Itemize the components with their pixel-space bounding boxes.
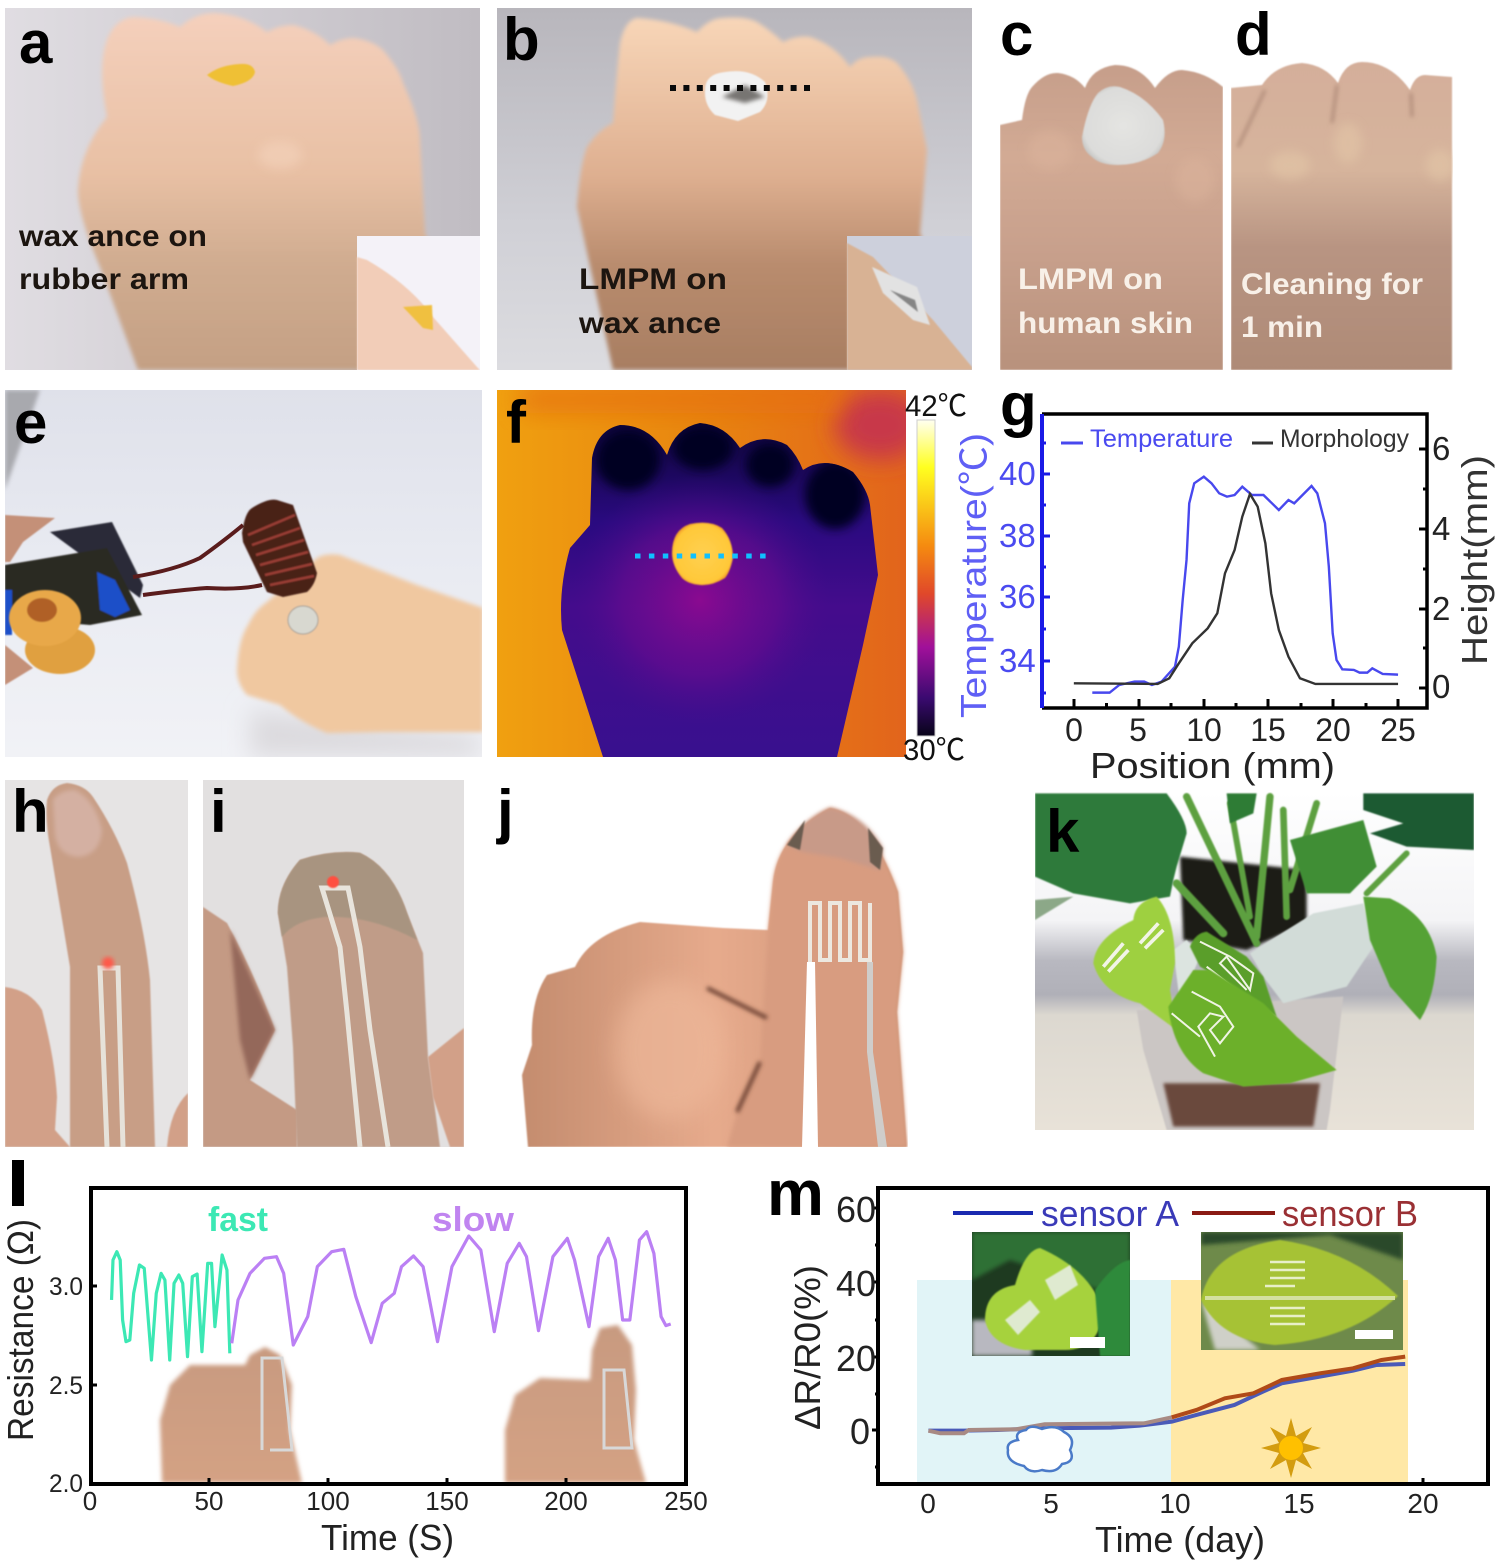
human hand d [1231, 62, 1452, 370]
x axis numbers: 10 [1186, 712, 1222, 748]
warm background tint [835, 390, 925, 460]
plot frame g [1042, 414, 1427, 708]
fast label: fast [208, 1201, 268, 1239]
right axis numbers [1432, 430, 1450, 705]
y axis title m: ΔR/R0(%) [787, 1265, 828, 1430]
chart l: resistance vs time [0, 1188, 708, 1558]
printed circuit h [100, 968, 123, 1147]
rubber hand b [577, 18, 972, 370]
temperature colour bar: 30℃ [903, 734, 965, 767]
right axis numbers: 2 [1432, 590, 1450, 627]
left axis title g: Temperature(℃) [953, 433, 994, 718]
printed leads j [802, 962, 818, 1147]
caption a: wax ance on [18, 220, 207, 253]
left axis numbers: 38 [999, 517, 1036, 554]
y axis numbers l: 2.5 [49, 1372, 83, 1400]
x axis title l: Time (S) [321, 1517, 454, 1558]
x axis numbers m: 15 [1283, 1488, 1315, 1519]
wax drop [207, 64, 255, 86]
panel e: induction heater photo [5, 390, 483, 757]
legend g: Morphology [1280, 425, 1409, 453]
hand e [237, 554, 483, 733]
thumb i [278, 852, 440, 1147]
toroid coil [9, 590, 95, 674]
finger creases d [1238, 85, 1412, 147]
left axis numbers: 40 [999, 455, 1036, 492]
nail edge shadows [787, 820, 883, 870]
cloudy background [917, 1280, 1171, 1483]
fingernail h [53, 790, 102, 857]
y axis numbers l [49, 1273, 83, 1498]
copper wires [133, 525, 262, 595]
x axis numbers m: 0 [920, 1488, 936, 1519]
plot frame l [91, 1188, 686, 1484]
x axis numbers m: 20 [1407, 1488, 1439, 1519]
label c: c [1000, 1, 1033, 68]
rubber hand a [76, 12, 428, 370]
LED i [327, 876, 339, 888]
caption c: LMPM on [1018, 263, 1163, 296]
top right leaf [1363, 793, 1474, 850]
leaf right [1363, 897, 1437, 1020]
panel h: finger with LED [5, 780, 188, 1147]
label m: m [767, 1157, 824, 1229]
knuckle shadows [596, 426, 865, 529]
morphology curve [1074, 494, 1398, 684]
dotted scan line [670, 85, 812, 91]
cyan scan line [635, 554, 767, 558]
right axis numbers: 4 [1432, 510, 1450, 547]
leaf centre [1190, 932, 1277, 1017]
y axis numbers m: 20 [836, 1338, 876, 1379]
palm crease [707, 988, 767, 1112]
clear pot [1137, 997, 1343, 1130]
panel c: LMPM on human skin [1000, 65, 1223, 370]
inset b [847, 236, 972, 370]
silver patch on skin [1082, 86, 1165, 165]
x axis title g: Position (mm) [1090, 745, 1335, 786]
x axis numbers l: 200 [544, 1486, 588, 1516]
x axis numbers l [83, 1486, 708, 1516]
leaf photo right [1201, 1232, 1403, 1350]
thumbnail [787, 808, 883, 870]
x axis numbers l: 250 [664, 1486, 708, 1516]
leaf photo left [972, 1232, 1130, 1356]
serpentine sensor j [810, 903, 870, 962]
sensor B curve [928, 1357, 1405, 1433]
fast curve [112, 1252, 230, 1360]
grey corner [5, 390, 40, 490]
panel k: plant with leaf sensors [1034, 792, 1474, 1130]
x axis numbers m [920, 1488, 1439, 1519]
x axis numbers l: 150 [425, 1486, 469, 1516]
stems [1177, 797, 1407, 943]
leaf large with serpentine [1168, 970, 1337, 1087]
panel j: thumb with serpentine sensor [522, 808, 907, 1147]
chart g: temperature and morphology [953, 414, 1495, 786]
x axis title m: Time (day) [1095, 1519, 1265, 1560]
y axis numbers l: 2.0 [49, 1470, 83, 1498]
hot spot [672, 523, 733, 585]
temperature curve [1092, 477, 1398, 693]
lower left foliage [1035, 897, 1073, 920]
thumb photo right [505, 1325, 646, 1483]
thumb tone [727, 808, 907, 1147]
caption b: wax ance [578, 307, 721, 340]
label g: g [1000, 371, 1037, 438]
silver LMPM blob [705, 71, 768, 121]
x axis numbers: 5 [1129, 712, 1147, 748]
panel a: wax ance on rubber arm [5, 8, 480, 370]
caption c: human skin [1018, 307, 1193, 340]
palm highlight [615, 980, 725, 1120]
y axis numbers m: 60 [836, 1189, 876, 1230]
caption b [578, 268, 725, 334]
holding hand left [5, 515, 55, 685]
right axis numbers: 0 [1432, 668, 1450, 705]
soil in pot [1163, 1083, 1320, 1127]
panel b: LMPM on wax ance [497, 8, 972, 370]
x axis numbers: 0 [1065, 712, 1083, 748]
leaf left [1093, 897, 1177, 1030]
label d: d [1235, 1, 1272, 68]
label f: f [506, 389, 527, 456]
knuckle highlights d [1275, 127, 1453, 178]
warm halo [596, 488, 804, 702]
x axis numbers: 15 [1250, 712, 1286, 748]
label k: k [1046, 798, 1080, 865]
caption b: LMPM on [579, 263, 727, 296]
hand j [522, 808, 907, 1147]
index finger h [46, 783, 155, 1147]
panel f: thermal image [497, 385, 925, 760]
x axis numbers m: 10 [1159, 1488, 1191, 1519]
icon: sun [1261, 1418, 1321, 1478]
label l [12, 1160, 24, 1206]
central leaves [1290, 820, 1377, 893]
top orange band [520, 385, 840, 413]
temperature colour bar: 42℃ [905, 390, 967, 423]
neighbour fingers h [5, 987, 188, 1147]
caption d [1242, 272, 1423, 337]
label a: a [19, 9, 53, 76]
plot frame m [872, 1188, 1488, 1484]
slow curve [232, 1232, 671, 1345]
silver dot [288, 606, 318, 634]
temperature colour bar [903, 390, 967, 767]
slow label: slow [432, 1201, 515, 1239]
knuckle highlights c [1028, 130, 1215, 202]
thumb photo left [160, 1347, 302, 1483]
y axis title l: Resistance (Ω) [0, 1219, 41, 1441]
copper coil [242, 500, 317, 597]
x axis numbers l: 100 [306, 1486, 350, 1516]
finger shadow i [230, 930, 275, 1080]
sunny background [1171, 1280, 1408, 1483]
caption a [18, 230, 205, 290]
y axis numbers m [836, 1189, 876, 1452]
LED h [102, 957, 114, 969]
legend g [1061, 425, 1409, 453]
caption d: 1 min [1241, 311, 1323, 344]
caption d: Cleaning for [1241, 268, 1423, 301]
legend m: sensor A [1041, 1193, 1179, 1234]
right axis numbers: 6 [1432, 430, 1450, 467]
x axis numbers m: 5 [1043, 1488, 1059, 1519]
paper wrap [1250, 903, 1373, 1003]
legend m [953, 1193, 1418, 1234]
thermal hand [555, 420, 885, 760]
legend g: Temperature [1090, 425, 1233, 453]
x axis numbers: 25 [1380, 712, 1416, 748]
neighbour finger left i [203, 907, 297, 1147]
printed circuit i [322, 888, 388, 1147]
inset a [357, 236, 480, 370]
caption c [1020, 268, 1192, 334]
label j: j [496, 778, 514, 845]
skin highlight a [262, 144, 298, 167]
icon: cloud [1008, 1427, 1072, 1471]
left axis numbers: 34 [999, 642, 1036, 679]
label b: b [503, 6, 540, 73]
legend m: sensor B [1282, 1193, 1418, 1234]
label e: e [14, 389, 47, 456]
x axis numbers l: 50 [195, 1486, 223, 1516]
y axis numbers l: 3.0 [49, 1273, 83, 1301]
caption a: rubber arm [19, 263, 189, 296]
panel d: cleaning for 1 min [1231, 62, 1454, 370]
x axis numbers: 20 [1315, 712, 1351, 748]
x axis numbers [1065, 712, 1416, 748]
x axis numbers l: 0 [83, 1486, 97, 1516]
top left leaf [1035, 793, 1187, 903]
circuit board [5, 522, 143, 635]
human hand c [1000, 65, 1223, 370]
table shadow [250, 710, 480, 757]
right axis title g: Height(mm) [1454, 455, 1495, 665]
sensor A curve [928, 1364, 1405, 1431]
dark soil behind stems [1180, 857, 1307, 950]
y axis numbers m: 40 [836, 1263, 876, 1304]
left axis numbers: 36 [999, 578, 1036, 615]
y axis numbers m: 0 [850, 1411, 870, 1452]
label h: h [12, 778, 49, 845]
thumbnail i [278, 852, 417, 940]
neighbour finger right i [428, 1028, 464, 1147]
label i: i [210, 778, 227, 845]
left axis numbers [999, 455, 1036, 679]
panel i: thumb with LED [203, 780, 464, 1147]
chart m: resistance change over days [787, 1188, 1488, 1560]
